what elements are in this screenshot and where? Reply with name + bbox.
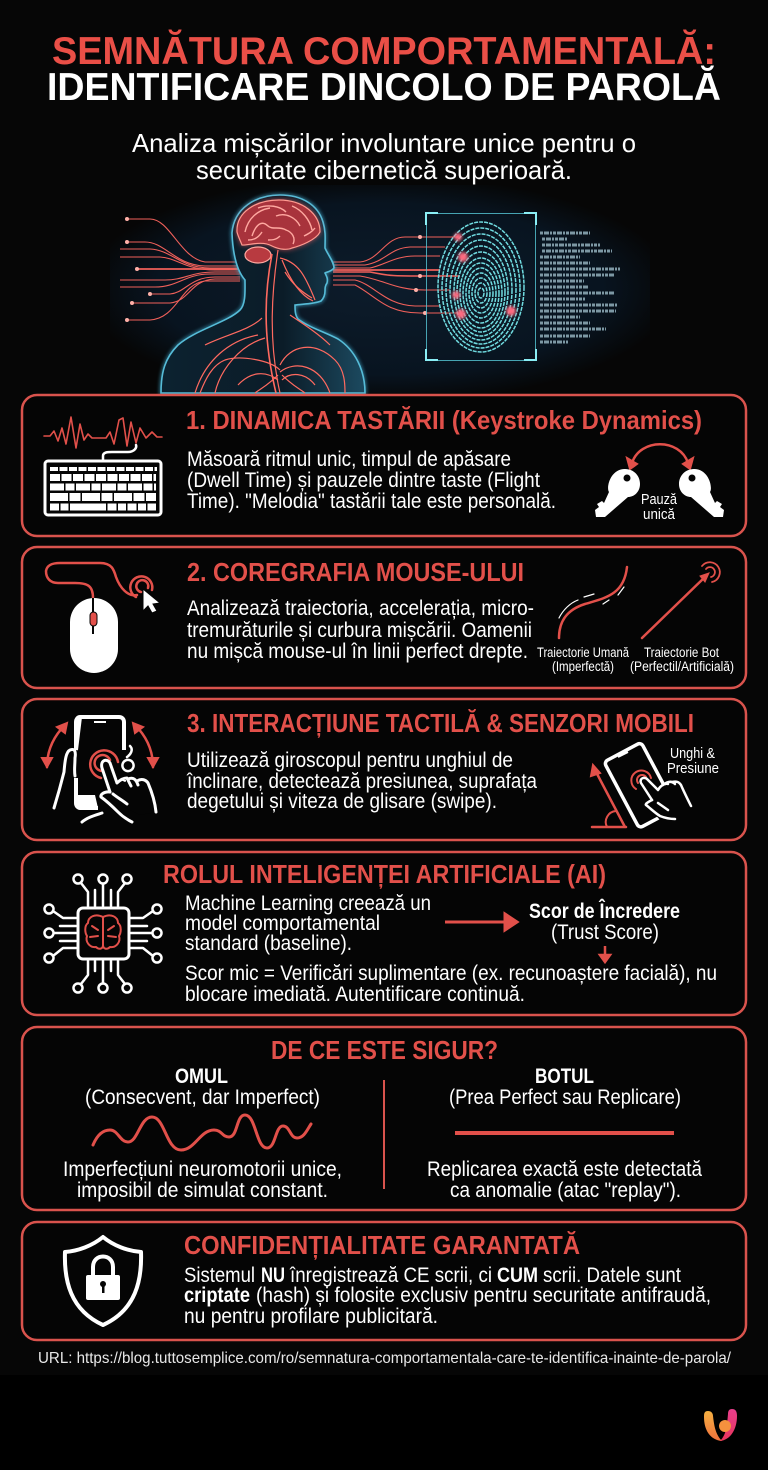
brain [237, 200, 320, 263]
column: bot: ca anomalie (atac "replay"). [450, 1179, 681, 1202]
body text: NU [261, 1264, 285, 1287]
body text: Scor mic = Verificări suplimentare (ex. recunoaștere facială), nu [185, 962, 717, 985]
column: human: (Consecvent, dar Imperfect) [85, 1086, 320, 1109]
chart: human trajectory: (Imperfectă) [552, 659, 614, 674]
panel: mouse choreography [22, 547, 746, 688]
body text: model comportamental [185, 912, 380, 935]
icon: AI chip with brain [44, 874, 162, 992]
chart: bot trajectory: (Perfectil/Artificială) [630, 659, 734, 674]
column: human: OMUL [175, 1065, 228, 1088]
column: bot [427, 1065, 702, 1202]
panel: privacy [22, 1222, 746, 1340]
subtitle: securitate cibernetică superioară. [196, 155, 572, 185]
heading: CONFIDENȚIALITATE GARANTATĂ [184, 1230, 580, 1260]
icon: tilted phone with angle: Presiune [667, 760, 719, 777]
body text: CUM [497, 1264, 538, 1287]
trust score [529, 899, 680, 944]
signal lines left [120, 219, 240, 320]
data readout [540, 233, 620, 342]
body text: înclinare, detectează presiunea, suprafața [186, 770, 537, 793]
body text: scrii. Datele sunt [543, 1264, 681, 1287]
body text [185, 892, 431, 955]
body text: (hash) și folosite exclusiv pentru securitate antifraudă, [256, 1284, 711, 1307]
body text [187, 448, 556, 513]
heading: 3. INTERACȚIUNE TACTILĂ & SENZORI MOBILI [187, 708, 694, 738]
body text: criptate [184, 1284, 250, 1307]
icon: keyboard [45, 445, 161, 515]
panel: role of AI [22, 852, 746, 1015]
body text: standard (baseline). [185, 932, 352, 955]
trust score: (Trust Score) [551, 921, 659, 944]
chart: bot trajectory: Traiectorie Bot [644, 645, 719, 660]
body text: tremurăturile și curbura mișcării. Oamenii [187, 619, 532, 642]
icon: waveform [44, 417, 162, 448]
icon: logo [704, 1409, 737, 1441]
body text: blocare imediată. Autentificare continuă. [185, 983, 525, 1006]
icon: keys with pause arc [595, 444, 724, 523]
body text: înregistrează CE scrii, ci [289, 1264, 492, 1287]
icon: phone with hand and tilt arrows [42, 717, 158, 822]
column: bot: Replicarea exactă este detectată [427, 1158, 702, 1181]
icon: keys with pause arc: Pauză [641, 491, 678, 508]
column: bot: BOTUL [535, 1065, 594, 1088]
chart: bot trajectory [630, 562, 734, 674]
heading: DE CE ESTE SIGUR? [271, 1035, 498, 1065]
title: SEMNĂTURA COMPORTAMENTALĂ: [52, 29, 716, 73]
body silhouette [161, 195, 365, 393]
panel: keystroke dynamics [22, 395, 746, 536]
trust score: Scor de Încredere [529, 899, 680, 923]
subtitle: Analiza mișcărilor involuntare unice pentru o [132, 128, 636, 158]
nerves [195, 250, 345, 393]
body text [184, 1264, 711, 1328]
body text [186, 749, 537, 813]
icon: keys with pause arc: unică [643, 506, 676, 523]
body text: nu pentru profilare publicitară. [184, 1305, 438, 1328]
body text: Analizează traiectoria, accelerația, micro- [187, 597, 534, 620]
heading: 1. DINAMICA TASTĂRII (Keystroke Dynamics) [186, 405, 702, 435]
panel: why it is safe [22, 1027, 746, 1210]
title [47, 29, 721, 109]
column: bot: (Prea Perfect sau Replicare) [449, 1086, 681, 1109]
scan frame [426, 214, 536, 360]
arrow [600, 946, 610, 962]
subtitle [132, 128, 636, 185]
title: IDENTIFICARE DINCOLO DE PAROLĂ [47, 65, 721, 109]
body text: Sistemul [184, 1264, 255, 1287]
column: human: imposibil de simulat constant. [77, 1179, 328, 1202]
body text: (Dwell Time) și pauzele dintre taste (Flight [187, 469, 540, 492]
heading: ROLUL INTELIGENȚEI ARTIFICIALE (AI) [163, 859, 606, 889]
arrow [445, 914, 517, 930]
column: human [63, 1065, 342, 1202]
body text: Măsoară ritmul unic, timpul de apăsare [187, 448, 511, 471]
body text [185, 962, 717, 1006]
icon: tilted phone with angle: Unghi & [670, 745, 715, 762]
icon: mouse with cable and cursor [46, 563, 160, 673]
chart: human trajectory: Traiectorie Umană [537, 645, 629, 660]
body text: Time). "Melodia" tastării tale este personală. [187, 490, 556, 513]
source url: URL: https://blog.tuttosemplice.com/ro/semnatura-comportamentala-care-te-identifica-inainte-de-parola/ [38, 1350, 732, 1367]
icon: shield with lock [65, 1237, 141, 1325]
body text: degetului și viteza de glisare (swipe). [187, 790, 497, 813]
icon: tilted phone with angle [591, 742, 719, 828]
signal lines right [333, 237, 460, 313]
body text: nu mișcă mouse-ul în linii perfect drepte. [187, 640, 528, 663]
fingerprint [438, 222, 524, 352]
hero illustration: human silhouette and fingerprint [110, 185, 650, 393]
heading: 2. COREGRAFIA MOUSE-ULUI [187, 557, 524, 587]
body text: Utilizează giroscopul pentru unghiul de [187, 749, 513, 772]
chart: human trajectory [537, 567, 629, 674]
panel: touch and mobile sensors [22, 699, 746, 840]
column: human: Imperfecțiuni neuromotorii unice, [63, 1158, 342, 1181]
body text [187, 597, 534, 663]
body text: Machine Learning creează un [185, 892, 431, 915]
